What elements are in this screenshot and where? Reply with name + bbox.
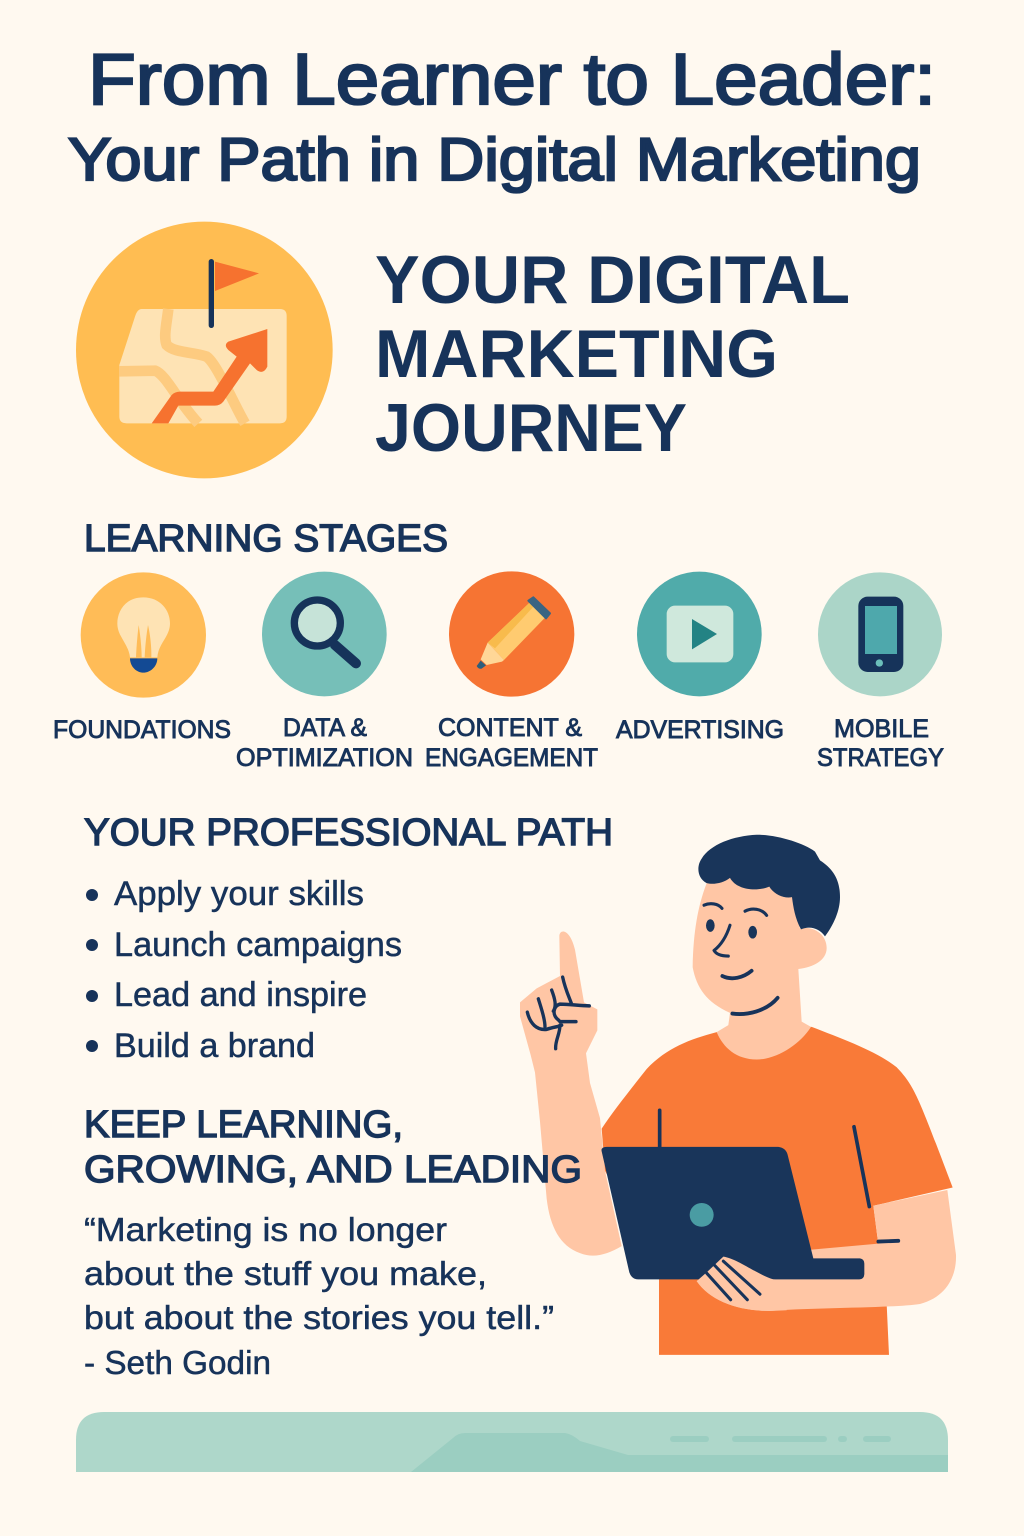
footer band [76, 1412, 948, 1472]
hair [698, 835, 840, 936]
icon: magnifying glass [262, 572, 387, 696]
heading: keep learning, growing, and leading: KEEP LEARNING, [84, 1104, 403, 1146]
hand on laptop [697, 1257, 787, 1311]
heading: learning stages: LEARNING STAGES [84, 518, 448, 560]
label: data and optimization [236, 714, 413, 772]
label: data and optimization: OPTIMIZATION [236, 744, 413, 772]
title: From Learner to Leader: [88, 40, 936, 120]
quote: Seth Godin [84, 1211, 554, 1381]
heading: your digital marketing journey: MARKETING [375, 316, 778, 392]
illustration: person pointing up and holding a laptop [520, 835, 956, 1355]
finger lines [527, 977, 589, 1049]
title [68, 40, 936, 193]
quote: Seth Godin: about the stuff you make, [84, 1255, 487, 1292]
heading: your digital marketing journey: JOURNEY [375, 390, 687, 466]
bullet list: professional path: Build a brand [114, 1027, 315, 1065]
quote: Seth Godin: but about the stories you tell.” [84, 1299, 554, 1336]
label: mobile strategy: MOBILE [834, 715, 929, 743]
label: mobile strategy: STRATEGY [817, 744, 944, 772]
quote: Seth Godin: “Marketing is no longer [84, 1211, 447, 1248]
heading: your professional path: YOUR PROFESSIONAL PATH [84, 812, 613, 854]
heading: your digital marketing journey [375, 242, 850, 466]
title: Your Path in Digital Marketing [68, 126, 921, 193]
shirt [602, 1027, 953, 1355]
shirt and arm lines [660, 1110, 898, 1242]
neck and face [693, 873, 827, 1060]
icon: pencil [449, 571, 574, 697]
icon: journey map with flag and rising arrow [76, 222, 333, 478]
label: content and engagement [425, 714, 598, 772]
quote: Seth Godin: - Seth Godin [84, 1344, 271, 1381]
bullet list: professional path [86, 875, 402, 1065]
label: foundations: FOUNDATIONS [53, 716, 231, 744]
bullet list: professional path: Lead and inspire [114, 976, 367, 1014]
facial features [704, 904, 778, 1014]
panel: learning stages [53, 571, 944, 772]
label: advertising: ADVERTISING [616, 716, 784, 744]
raised arm and hand [520, 932, 622, 1256]
heading: keep learning, growing, and leading: GROWING, AND LEADING [84, 1149, 582, 1191]
heading: your digital marketing journey: YOUR DIGITAL [375, 242, 850, 318]
label: content and engagement: ENGAGEMENT [425, 744, 598, 772]
forearm [697, 1190, 956, 1311]
label: data and optimization: DATA & [283, 714, 367, 742]
bullet list: professional path: Launch campaigns [114, 926, 402, 964]
bullet list: professional path: Apply your skills [114, 875, 364, 913]
icon: smartphone [818, 572, 942, 696]
heading: keep learning, growing, and leading [84, 1104, 582, 1191]
label: mobile strategy [817, 715, 944, 772]
laptop [602, 1147, 864, 1279]
icon: video play [637, 572, 762, 696]
label: content and engagement: CONTENT & [438, 714, 582, 742]
icon: light bulb [81, 572, 206, 698]
